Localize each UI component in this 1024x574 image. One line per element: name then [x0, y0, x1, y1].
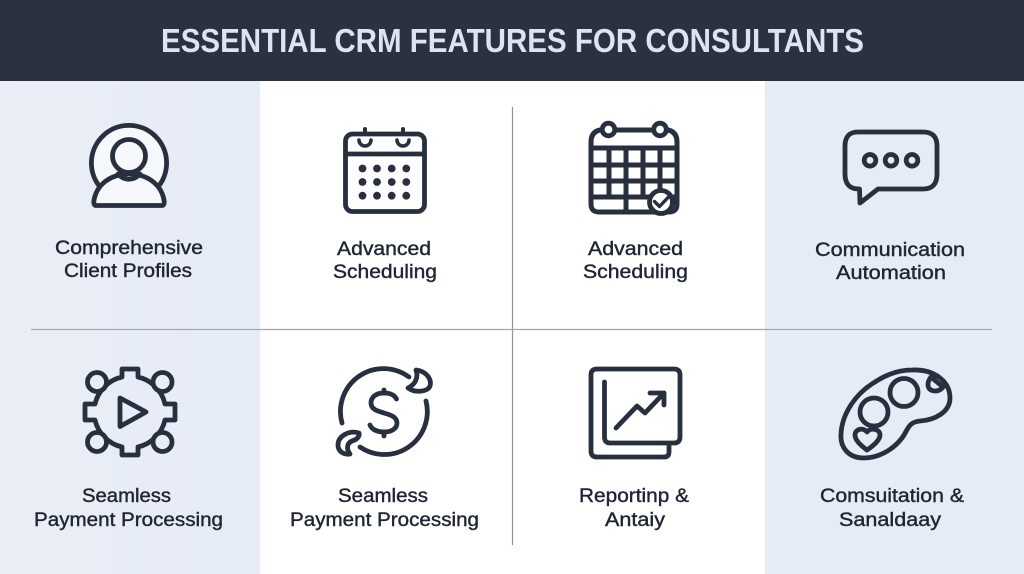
- label: Comprehensive Client Profiles: Comprehensive: [55, 238, 203, 259]
- icon: report chart with rising arrow: [591, 369, 680, 457]
- panel: Advanced Scheduling 2: [583, 123, 688, 283]
- label: Advanced Scheduling: Scheduling: [583, 262, 688, 283]
- label: Seamless Payment Processing: [34, 486, 223, 531]
- title banner: [0, 0, 1024, 81]
- label: Communication Automation: Communication: [815, 240, 965, 261]
- panel: Advanced Scheduling 1: [333, 129, 437, 283]
- grid divider: vertical: [512, 107, 514, 545]
- panel: Seamless Payment Processing 1: [34, 369, 223, 531]
- panel: Comprehensive Client Profiles: [55, 125, 203, 282]
- label: Comprehensive Client Profiles: Client Profiles: [64, 261, 192, 282]
- label: Comsuitation & Sanaldaay: Comsuitation &: [820, 486, 964, 507]
- label: Comsuitation & Sanaldaay: [820, 486, 964, 531]
- label: Advanced Scheduling: Advanced: [337, 239, 431, 260]
- panel: Reporting: [579, 369, 689, 531]
- label: Seamless Payment Processing: Seamless: [338, 486, 428, 507]
- panel: Communication Automation: [815, 132, 965, 284]
- label: Reportinp & Antaiy: Reportinp &: [579, 486, 689, 507]
- label: Comprehensive Client Profiles: [55, 238, 203, 282]
- icon: dollar with cycle arrows: [338, 369, 430, 455]
- panel: left column background: [0, 81, 260, 574]
- label: Communication Automation: [815, 240, 965, 284]
- panel: Seamless Payment Processing 2: [290, 369, 479, 531]
- title: ESSENTIAL CRM FEATURES FOR CONSULTANTS: [161, 22, 864, 59]
- icon: palette: [841, 370, 950, 458]
- icon: chat bubble: [845, 132, 937, 203]
- icon: calendar with dots: [346, 129, 424, 212]
- label: Reportinp & Antaiy: [579, 486, 689, 531]
- icon: client profile: [91, 125, 167, 206]
- panel: right column background: [765, 81, 1024, 574]
- panel: Consultation: [820, 370, 964, 531]
- label: Comsuitation & Sanaldaay: Sanaldaay: [839, 510, 942, 531]
- label: Reportinp & Antaiy: Antaiy: [605, 510, 666, 531]
- label: Seamless Payment Processing: Payment Processing: [290, 510, 479, 531]
- label: Communication Automation: Automation: [836, 263, 946, 284]
- label: Advanced Scheduling: Advanced: [588, 239, 683, 260]
- grid divider: horizontal: [31, 328, 992, 330]
- icon: calendar grid with check badge: [591, 123, 677, 214]
- label: Advanced Scheduling: [333, 239, 437, 283]
- label: Seamless Payment Processing: Payment Processing: [34, 510, 223, 531]
- label: Advanced Scheduling: Scheduling: [333, 262, 437, 283]
- label: Seamless Payment Processing: [290, 486, 479, 531]
- label: Seamless Payment Processing: Seamless: [82, 486, 171, 507]
- label: Advanced Scheduling: [583, 239, 688, 283]
- icon: gear with play button: [85, 369, 175, 455]
